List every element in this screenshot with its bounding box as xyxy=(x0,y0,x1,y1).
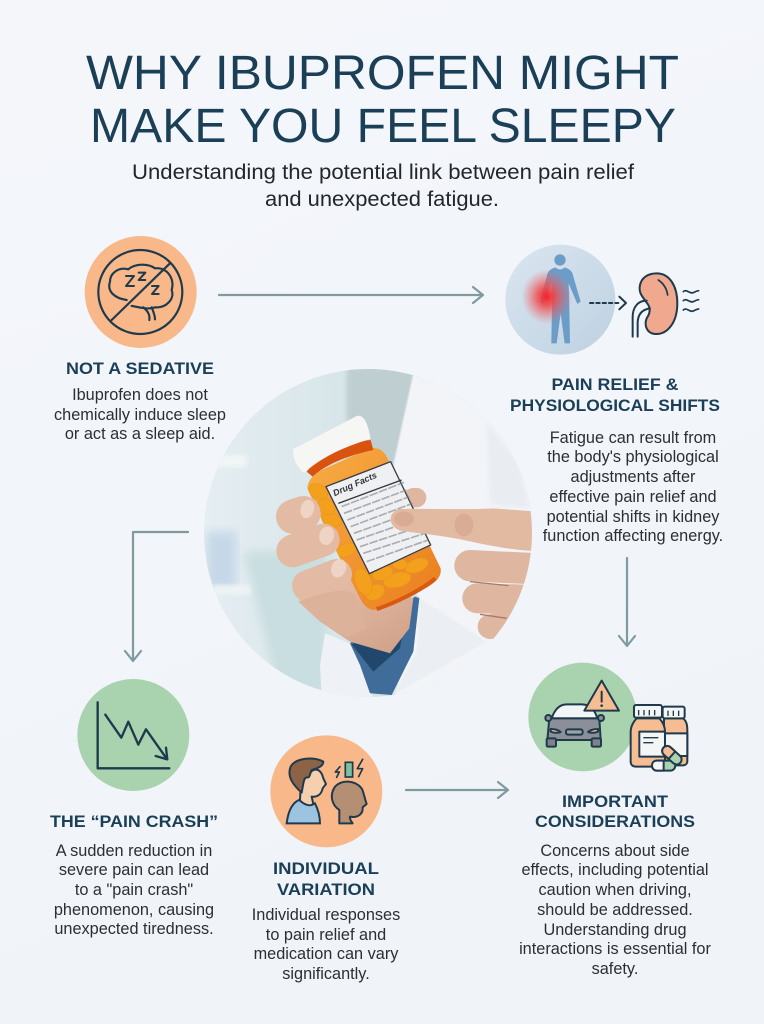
heading: not a sedative: NOT A SEDATIVE xyxy=(66,359,214,378)
text: important considerations: should be addressed. xyxy=(537,901,693,919)
sleeve xyxy=(350,597,419,695)
text: individual variation: to pain relief and xyxy=(266,926,386,944)
medicine bottles xyxy=(631,705,687,771)
text: pain crash: to a "pain crash" xyxy=(75,881,193,899)
text: pain crash: severe pain can lead xyxy=(59,861,209,879)
text: pain crash: phenomenon, causing xyxy=(54,901,214,919)
text: important considerations: Concerns about side xyxy=(540,842,690,860)
label heading: Drug Facts xyxy=(331,470,378,498)
heading: pain relief and physiological shifts xyxy=(510,375,720,415)
icon: body and kidney xyxy=(505,245,699,355)
text: pain crash: unexpected tiredness. xyxy=(54,920,214,938)
subtitle: and unexpected fatigue. xyxy=(265,187,499,211)
text: important considerations: caution when driving, xyxy=(539,881,691,899)
arrow: individual variation to considerations xyxy=(406,782,508,798)
coat xyxy=(393,375,531,694)
text: important considerations: interactions is essential for xyxy=(519,940,711,958)
heading: pain relief and physiological shifts: PHYSIOLOGICAL SHIFTS xyxy=(510,396,720,415)
arrow: photo to pain crash xyxy=(125,532,188,661)
text: pain relief and physiological shifts: the body's physiological xyxy=(547,448,719,466)
car xyxy=(545,704,604,747)
text: important considerations xyxy=(519,842,711,978)
title: MAKE YOU FEEL SLEEPY xyxy=(90,100,676,153)
arrow: physiological shifts to considerations xyxy=(619,558,635,646)
title: WHY IBUPROFEN MIGHT xyxy=(86,47,679,100)
text: individual variation: Individual responses xyxy=(252,906,400,924)
text: not a sedative xyxy=(54,386,226,443)
text: pain relief and physiological shifts: potential shifts in kidney xyxy=(547,508,720,526)
text: individual variation: significantly. xyxy=(282,965,370,983)
gripping fingers xyxy=(293,513,337,586)
heading: pain crash: THE “PAIN CRASH” xyxy=(50,812,218,831)
text: not a sedative: or act as a sleep aid. xyxy=(65,425,215,443)
icon: two people xyxy=(270,735,382,847)
icon: pain crash chart xyxy=(77,679,189,791)
text: pain relief and physiological shifts: effective pain relief and xyxy=(549,488,717,506)
photo: hands holding pill bottle xyxy=(204,369,532,697)
heading: individual variation xyxy=(273,859,379,899)
heading: individual variation: INDIVIDUAL xyxy=(273,859,379,878)
title xyxy=(86,47,679,153)
text: pain crash: A sudden reduction in xyxy=(56,842,212,860)
text: important considerations: safety. xyxy=(592,960,638,978)
icon: driving caution and medication xyxy=(528,663,687,771)
far fingers xyxy=(413,498,540,627)
pointing finger xyxy=(391,508,537,551)
heading: pain relief and physiological shifts: PAIN RELIEF & xyxy=(552,375,678,394)
arrow: sedative to pain relief xyxy=(219,287,483,303)
heading: important considerations: IMPORTANT xyxy=(562,792,669,811)
cap xyxy=(293,416,371,473)
text: important considerations: Understanding drug xyxy=(543,921,687,939)
heading: important considerations xyxy=(535,792,695,831)
bottle xyxy=(307,448,441,610)
heading: important considerations: CONSIDERATIONS xyxy=(535,812,695,831)
text: pain relief and physiological shifts: adjustments after xyxy=(571,468,696,486)
text: individual variation xyxy=(252,906,400,983)
text: individual variation: medication can vary xyxy=(254,945,399,963)
palm xyxy=(295,578,413,653)
text: pain relief and physiological shifts: function affecting energy. xyxy=(543,527,723,545)
label xyxy=(326,462,431,574)
icon: no sleep brain xyxy=(85,236,197,348)
text: pain relief and physiological shifts: Fatigue can result from xyxy=(550,429,716,447)
text: not a sedative: Ibuprofen does not xyxy=(72,386,208,404)
subtitle: Understanding the potential link between pain relief xyxy=(132,160,634,184)
subtitle xyxy=(132,160,634,211)
warning triangle xyxy=(584,681,619,711)
text: pain relief and physiological shifts xyxy=(543,429,723,545)
text: not a sedative: chemically induce sleep xyxy=(54,406,226,424)
text: important considerations: effects, including potential xyxy=(521,861,709,879)
text: pain crash xyxy=(54,842,214,938)
heading: individual variation: VARIATION xyxy=(277,880,375,899)
